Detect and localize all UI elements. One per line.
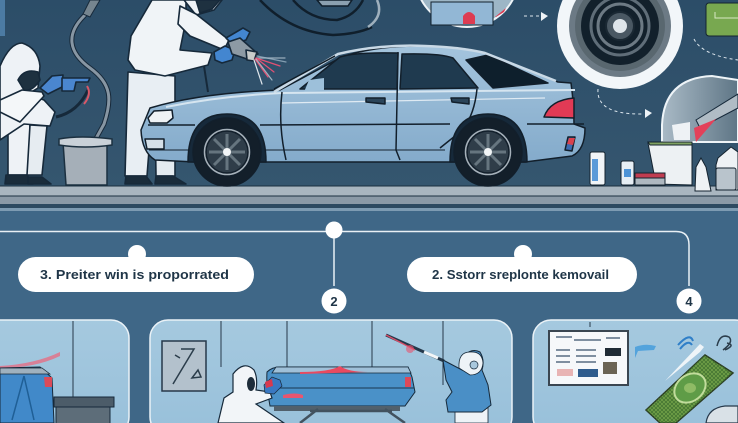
red overspray streak [0, 352, 60, 368]
figure: seated painter in white suit [0, 43, 90, 184]
headlight [148, 110, 173, 123]
background: lower section [0, 208, 738, 423]
wheel arches and wheels [188, 114, 266, 162]
icon: paint supplies on the shelf [590, 142, 738, 191]
icon: wall panel at left edge [0, 0, 5, 36]
car illustration [141, 46, 585, 186]
step label pill: step 2: 2. Sstorr sreplonte kemovail [432, 267, 609, 282]
door seams [281, 92, 286, 160]
windows [300, 53, 398, 89]
number badge 2: 2 [330, 294, 338, 309]
connector line with node [0, 222, 689, 286]
icon: red paint spray [254, 56, 286, 84]
arrow: dashed curve right [694, 39, 738, 60]
wall screen [549, 331, 628, 385]
arrow: dashed to wheel detail [524, 12, 548, 21]
icon: hose at top [72, 0, 109, 171]
icon: wall cable loops [260, 0, 379, 35]
detail circle: tail light [415, 0, 519, 27]
mirror [304, 78, 324, 92]
step label pill: step 3 [18, 245, 254, 292]
white trousers of blue suited worker [454, 408, 488, 423]
belt highlights [166, 90, 575, 107]
painter leaning over car [218, 366, 284, 423]
blue suited worker [443, 351, 491, 412]
wifi icon [678, 337, 693, 349]
paint can [706, 406, 738, 423]
step label pill: step 2 [407, 245, 637, 292]
swirl icon [717, 336, 731, 350]
white blade [665, 344, 704, 381]
background: workshop wall [0, 0, 738, 187]
detail circle: wheel close-up [557, 0, 683, 89]
green mat [646, 355, 733, 423]
car body [141, 46, 585, 162]
spray wand [386, 335, 444, 361]
step label pill: step 3: 3. Preiter win is proporrated [40, 267, 229, 282]
waste bin [54, 397, 114, 407]
tail light [544, 98, 574, 118]
number badge 2 [322, 288, 346, 314]
figure: standing painter with spray gun [125, 0, 258, 184]
icon: green product box [706, 3, 738, 36]
small blue tag [635, 345, 656, 358]
car on stand [267, 367, 415, 406]
panel: painting step [150, 320, 512, 423]
wall poster [162, 341, 206, 391]
number badge 4 [676, 288, 702, 314]
panel: masking step [0, 320, 129, 423]
floor strip [0, 186, 738, 211]
detail dome: paint arm [662, 76, 738, 142]
arrow: dashed curve to tools [598, 89, 652, 118]
covered car [0, 367, 54, 423]
panel: inspection step [533, 320, 738, 423]
number badge 4: 4 [685, 294, 693, 309]
icon: bucket [59, 137, 112, 185]
door handles [366, 98, 469, 104]
